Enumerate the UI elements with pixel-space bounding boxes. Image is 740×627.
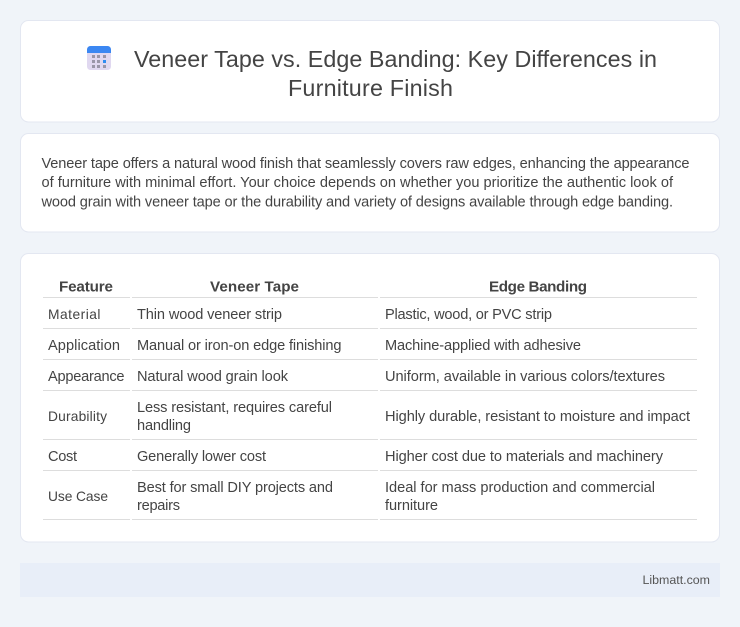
panel: introduction <box>20 134 720 232</box>
intro text: of furniture with minimal effort. Your choice depends on whether you prioritize the authentic look of <box>42 175 674 191</box>
row: use case: repairs <box>137 498 180 514</box>
row: application: Machine-applied with adhesive <box>385 338 581 354</box>
table header row <box>43 278 697 298</box>
row: material: Material <box>48 307 100 322</box>
row: cost: Higher cost due to materials and machinery <box>385 449 664 465</box>
intro text <box>40 156 690 210</box>
row: appearance: Appearance <box>48 369 124 385</box>
row: cost: Generally lower cost <box>137 449 266 465</box>
row: application: Manual or iron-on edge finishing <box>137 338 342 354</box>
footer credit: Libmatt.com <box>642 573 710 587</box>
title: Furniture Finish <box>288 75 453 101</box>
panel: header <box>20 20 720 122</box>
row: durability: Highly durable, resistant to moisture and impact <box>385 409 690 425</box>
table header row: Feature <box>59 278 113 296</box>
row: appearance: Natural wood grain look <box>137 369 289 385</box>
row: durability <box>43 400 697 440</box>
intro text: Veneer tape offers a natural wood finish that seamlessly covers raw edges, enhancing the appearance <box>42 156 690 172</box>
panel: comparison table <box>20 254 720 542</box>
row: appearance: Uniform, available in various colors/textures <box>385 369 665 385</box>
row: material <box>43 307 697 328</box>
row: application <box>43 338 697 360</box>
row: use case: Use Case <box>48 489 108 504</box>
row: durability: Durability <box>48 409 107 424</box>
row: durability: handling <box>137 418 191 434</box>
title: Veneer Tape vs. Edge Banding: Key Differences in <box>134 46 657 72</box>
row: cost <box>43 449 697 470</box>
title <box>134 46 657 101</box>
row: use case: furniture <box>385 498 438 514</box>
icon: calendar <box>87 46 111 70</box>
row: application: Application <box>48 338 120 354</box>
footer bar <box>20 563 720 597</box>
row: material: Plastic, wood, or PVC strip <box>385 307 552 323</box>
row: cost: Cost <box>48 449 77 465</box>
row: use case: Best for small DIY projects and <box>137 480 333 496</box>
intro text: wood grain with veneer tape or the durability and variety of designs available through edge banding. <box>40 194 673 210</box>
row: use case <box>43 480 697 520</box>
row: use case: Ideal for mass production and commercial <box>385 480 655 496</box>
table header row: Edge Banding <box>489 278 587 296</box>
row: appearance <box>43 369 697 390</box>
row: material: Thin wood veneer strip <box>137 307 282 323</box>
row: durability: Less resistant, requires careful <box>137 400 332 416</box>
table header row: Veneer Tape <box>210 278 299 296</box>
